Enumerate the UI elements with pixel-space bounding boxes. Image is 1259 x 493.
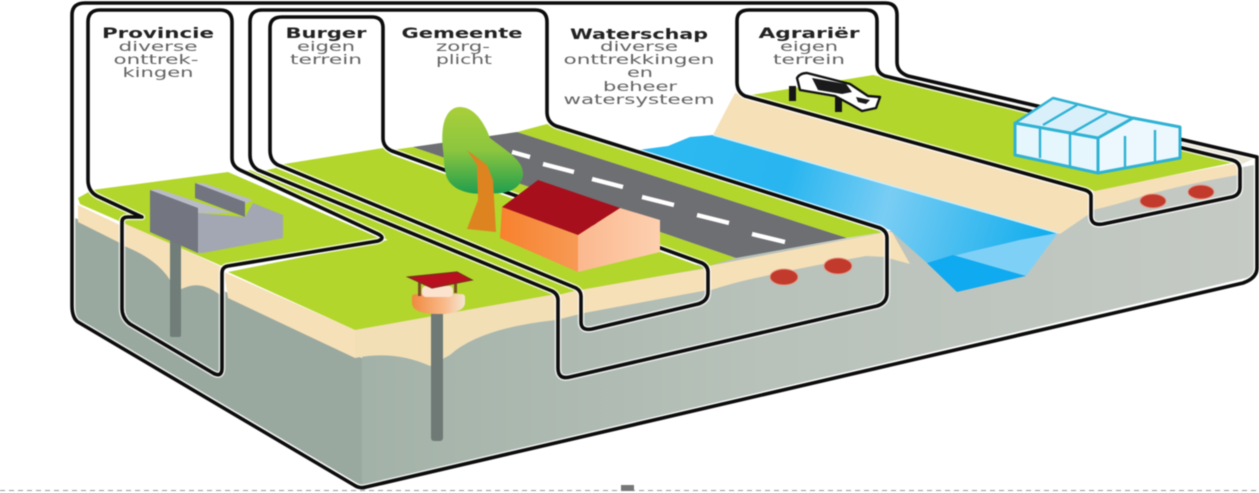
well left post (418, 280, 421, 296)
sand: main block right (355, 293, 556, 366)
tree trunk (467, 150, 496, 232)
greenhouse side (1015, 123, 1098, 173)
grass: agrarian field (745, 75, 1236, 191)
sand: left strip (78, 205, 122, 244)
icon: greenhouse (1015, 98, 1180, 173)
factory dark wall (150, 190, 198, 253)
pipe four (1188, 185, 1214, 199)
body line 5: watersysteem (564, 93, 714, 108)
heading: Agrariër (758, 26, 860, 42)
tree foliage (442, 107, 523, 194)
label: Burger (286, 26, 367, 68)
label: Provincie (102, 26, 214, 81)
sand: gemeente front (708, 232, 886, 291)
sand: province front (124, 222, 224, 298)
factory front roof strip (150, 189, 232, 213)
ground block: subsoil (75, 165, 1254, 486)
road with dashes (413, 132, 847, 258)
label: Gemeente (402, 26, 522, 68)
body line 1: diverse (600, 40, 678, 55)
body line 4: beheer (603, 80, 678, 95)
water: deep section (927, 255, 1026, 292)
water: shallow section (953, 233, 1058, 276)
heading: Gemeente (402, 26, 522, 42)
house right wall (578, 208, 660, 272)
grass: far verge (517, 124, 884, 238)
subsoil: right face (362, 165, 1254, 486)
pipe two (824, 258, 852, 274)
icon: factory (150, 183, 283, 253)
road surface (413, 132, 847, 258)
contour: agrarier (737, 10, 1240, 224)
pipes: agrarian drainage (1140, 185, 1214, 208)
well roof (408, 272, 472, 288)
label: Waterschap (564, 27, 714, 108)
sand: burger front (556, 268, 708, 320)
sand: right river bank (713, 93, 1092, 234)
contour: province (88, 10, 382, 375)
grass: gemeente verge (392, 147, 736, 266)
contour: gemeente and waterschap (250, 10, 887, 378)
well base (412, 294, 465, 314)
body line 1: zorg- (436, 40, 490, 55)
water: bank highlight (713, 135, 1058, 233)
greenhouse roof (1015, 98, 1133, 138)
pipe three (1140, 194, 1166, 208)
heading: Burger (286, 26, 367, 42)
river (638, 135, 1058, 292)
page break handle (621, 485, 634, 491)
body line 2: onttrek- (114, 53, 199, 68)
body line 1: eigen (297, 40, 355, 55)
grass: burger garden (278, 148, 705, 290)
cow head patch (856, 97, 870, 104)
body line 2: terrein (773, 53, 845, 68)
contour: burger (270, 17, 708, 329)
body line 3: en (627, 66, 653, 81)
water surface (638, 135, 1058, 263)
body line 1: diverse (118, 40, 198, 55)
grass: strip between lines (258, 168, 578, 295)
icon: tree (442, 107, 523, 232)
grass surfaces (78, 75, 1236, 330)
well interior (422, 286, 453, 297)
pipes: gemeente sewer (770, 258, 852, 285)
grass: main block (228, 170, 556, 330)
body line 2: onttrekkingen (564, 53, 714, 68)
sand: main block left (224, 272, 355, 358)
sand: agrarian front (1093, 163, 1238, 210)
sand: back strip behind agrarian line (885, 77, 1255, 165)
heading: Waterschap (570, 27, 708, 43)
label: Agrarier (758, 26, 860, 68)
cow patches (812, 78, 852, 94)
body line 2: terrein (290, 53, 362, 68)
body line 2: plicht (436, 53, 492, 68)
sand: left river bank (888, 232, 910, 264)
house roof (502, 180, 620, 235)
cow legs (789, 86, 842, 112)
well right post (454, 282, 457, 293)
page break line (0, 485, 1259, 491)
well pipe: burger (431, 312, 443, 441)
body line 3: kingen (122, 66, 194, 81)
grass: province (78, 172, 384, 266)
greenhouse frames (1040, 105, 1155, 167)
pipe one (770, 269, 798, 285)
factory rear wall (195, 183, 245, 217)
icon: house (500, 180, 660, 272)
icon: cow (789, 73, 880, 112)
well pipe: province (170, 240, 181, 337)
house left wall (500, 207, 578, 272)
topsoil: sand layers (78, 77, 1255, 366)
road markings (512, 152, 785, 242)
body line 1: eigen (780, 40, 838, 55)
factory rear roof strip (195, 183, 253, 204)
subsoil: left face (75, 218, 362, 486)
heading: Provincie (102, 26, 214, 42)
cow body (797, 73, 880, 111)
icon: well (408, 272, 472, 314)
factory light body (198, 203, 283, 253)
greenhouse end (1098, 118, 1180, 173)
